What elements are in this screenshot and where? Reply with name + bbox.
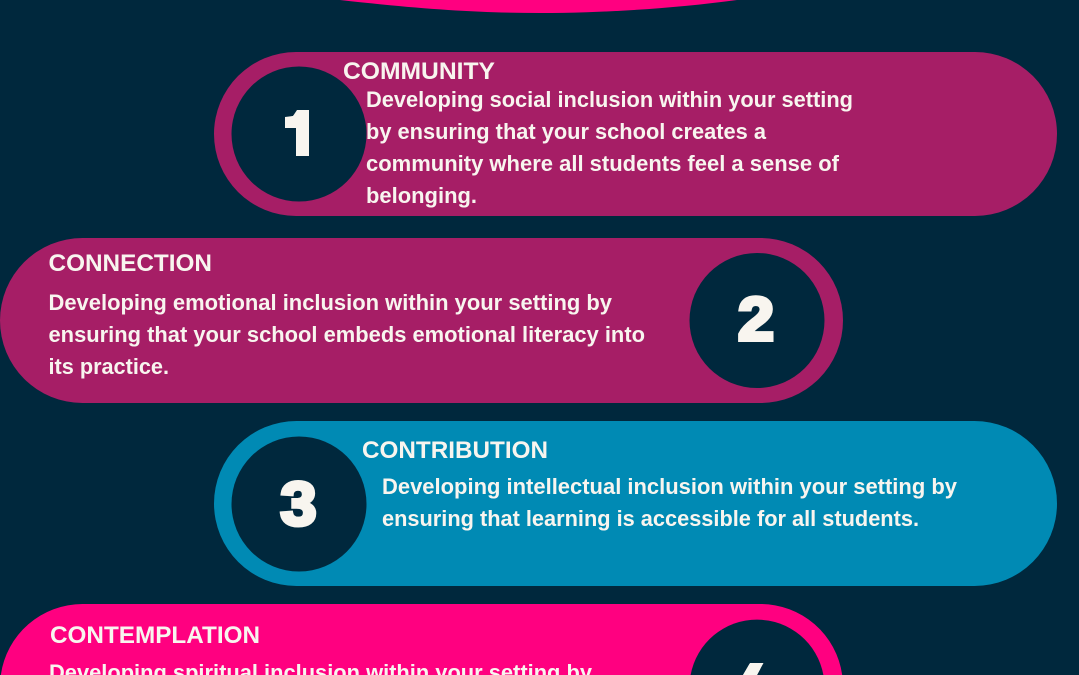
text: connection description [48,290,645,379]
text: connection description: Developing emotional inclusion within your setting by [48,290,613,315]
heading: connection: CONNECTION [48,250,212,277]
panel: contribution [214,421,1057,586]
heading: contribution: CONTRIBUTION [362,437,548,464]
text: community description: by ensuring that your school creates a [366,119,767,144]
number circle 4 [691,620,823,675]
heading: community: COMMUNITY [343,58,495,85]
text: contribution description [382,474,958,531]
text: contribution description: ensuring that learning is accessible for all students. [382,506,919,531]
text: contribution description: Developing intellectual inclusion within your setting by [382,474,958,499]
number 2: 2 [738,285,774,353]
number circle 1 [232,66,366,202]
text: connection description: ensuring that your school embeds emotional literacy into [48,322,645,347]
number 1: 1 [279,101,319,169]
number circle 3 [232,436,366,572]
panel: connection [0,238,843,403]
panel: community [214,52,1057,216]
text: community description: community where all students feel a sense of [366,151,840,176]
heading: contemplation: CONTEMPLATION [50,622,260,649]
text: community description: Developing social inclusion within your setting [366,87,853,112]
text: community description [366,87,853,208]
text: community description: belonging. [366,183,477,208]
number circle 2 [690,253,824,388]
text: connection description: its practice. [48,354,169,379]
top pink arc [340,0,737,13]
panel: contemplation [1,604,842,675]
number 3: 3 [280,470,316,538]
